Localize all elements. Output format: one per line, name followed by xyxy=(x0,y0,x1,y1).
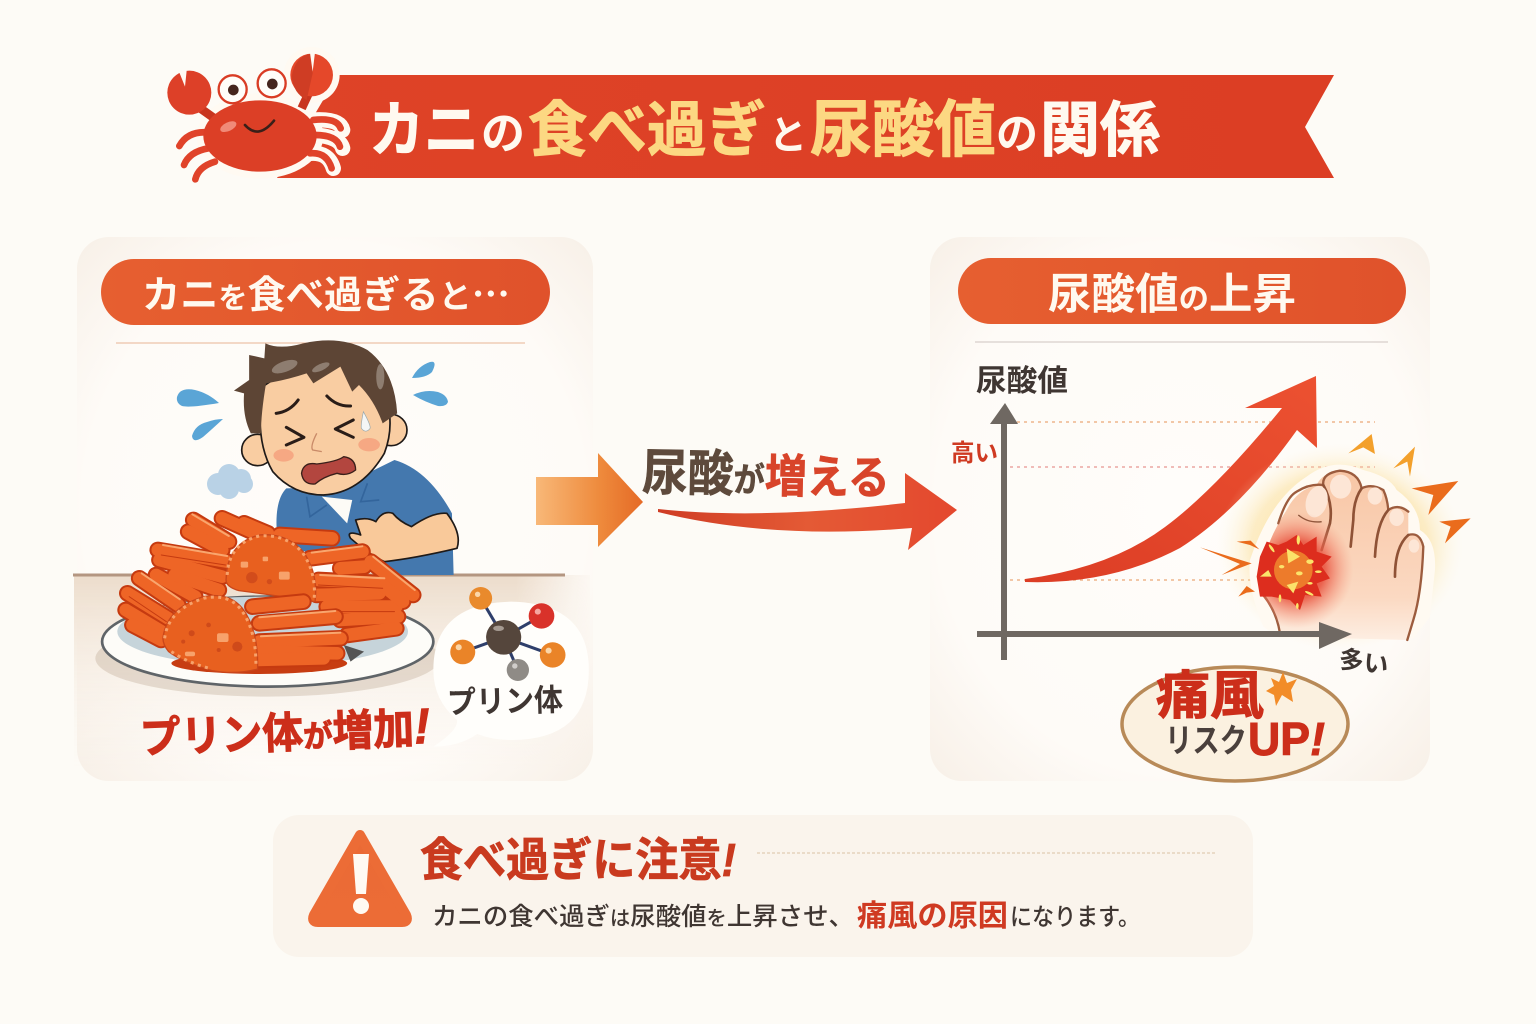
panel: warning xyxy=(273,815,1253,957)
warning sentence xyxy=(432,900,1140,933)
panel: uric acid rise xyxy=(930,237,1471,781)
title text: の xyxy=(481,108,525,159)
callout: gout risk up: リスク xyxy=(1165,722,1247,759)
warning sentence: カニの食べ過ぎは尿酸値を上昇させ、 xyxy=(432,903,854,931)
arrow: orange to uric acid xyxy=(536,453,643,547)
title text: カニ xyxy=(369,97,479,164)
pill heading: after eating too much crab: カニを食べ過ぎると… xyxy=(142,264,510,319)
callout: purine bubble xyxy=(433,587,589,747)
illustration: painful foot with gout xyxy=(1200,434,1471,650)
pill heading: uric acid rise xyxy=(958,258,1406,324)
callout: gout risk up xyxy=(1122,667,1348,781)
warning sentence: になります。 xyxy=(1010,904,1140,931)
callout: gout risk up: UP! xyxy=(1248,713,1325,765)
title text: 食べ過ぎ xyxy=(528,97,766,164)
icon: blue sweat drops xyxy=(177,362,448,440)
table xyxy=(73,574,580,702)
chart axes xyxy=(977,403,1352,660)
illustration: plate of crabs xyxy=(95,514,440,697)
label: purine: プリン体 xyxy=(447,682,563,721)
warning heading: 食べ過ぎに注意! xyxy=(420,834,736,886)
text: uric acid increases: 尿酸が増える xyxy=(642,445,890,505)
icon: breath cloud xyxy=(207,464,253,499)
pill heading: uric acid rise: 尿酸値の上昇 xyxy=(1048,271,1296,319)
title text: と xyxy=(769,114,807,158)
molecule xyxy=(450,587,566,681)
icon: warning triangle xyxy=(313,835,407,922)
icon: orange star xyxy=(1266,672,1297,706)
panel: overeating crab xyxy=(73,237,593,781)
label: high: 高い xyxy=(951,440,998,467)
title banner xyxy=(277,75,1334,178)
warning sentence: 痛風の原因 xyxy=(857,900,1008,933)
title text: 関係 xyxy=(1040,97,1160,164)
title text xyxy=(369,96,1160,165)
callout: gout risk up: 痛風 xyxy=(1156,668,1264,726)
chart grid lines xyxy=(1010,422,1375,580)
title text: 尿酸値 xyxy=(810,96,996,165)
illustration: man with stomach ache xyxy=(234,340,458,575)
label: more: 多い xyxy=(1337,645,1390,680)
arrow: rising uric acid curve xyxy=(1025,376,1317,582)
label: uric acid value: 尿酸値 xyxy=(976,365,1068,398)
pill heading: after eating too much crab xyxy=(101,259,550,325)
title text: の xyxy=(996,111,1038,159)
text: purine increases: プリン体が増加! xyxy=(139,698,431,764)
arrow: red curved xyxy=(658,473,957,550)
icon: crab mascot xyxy=(167,47,343,179)
